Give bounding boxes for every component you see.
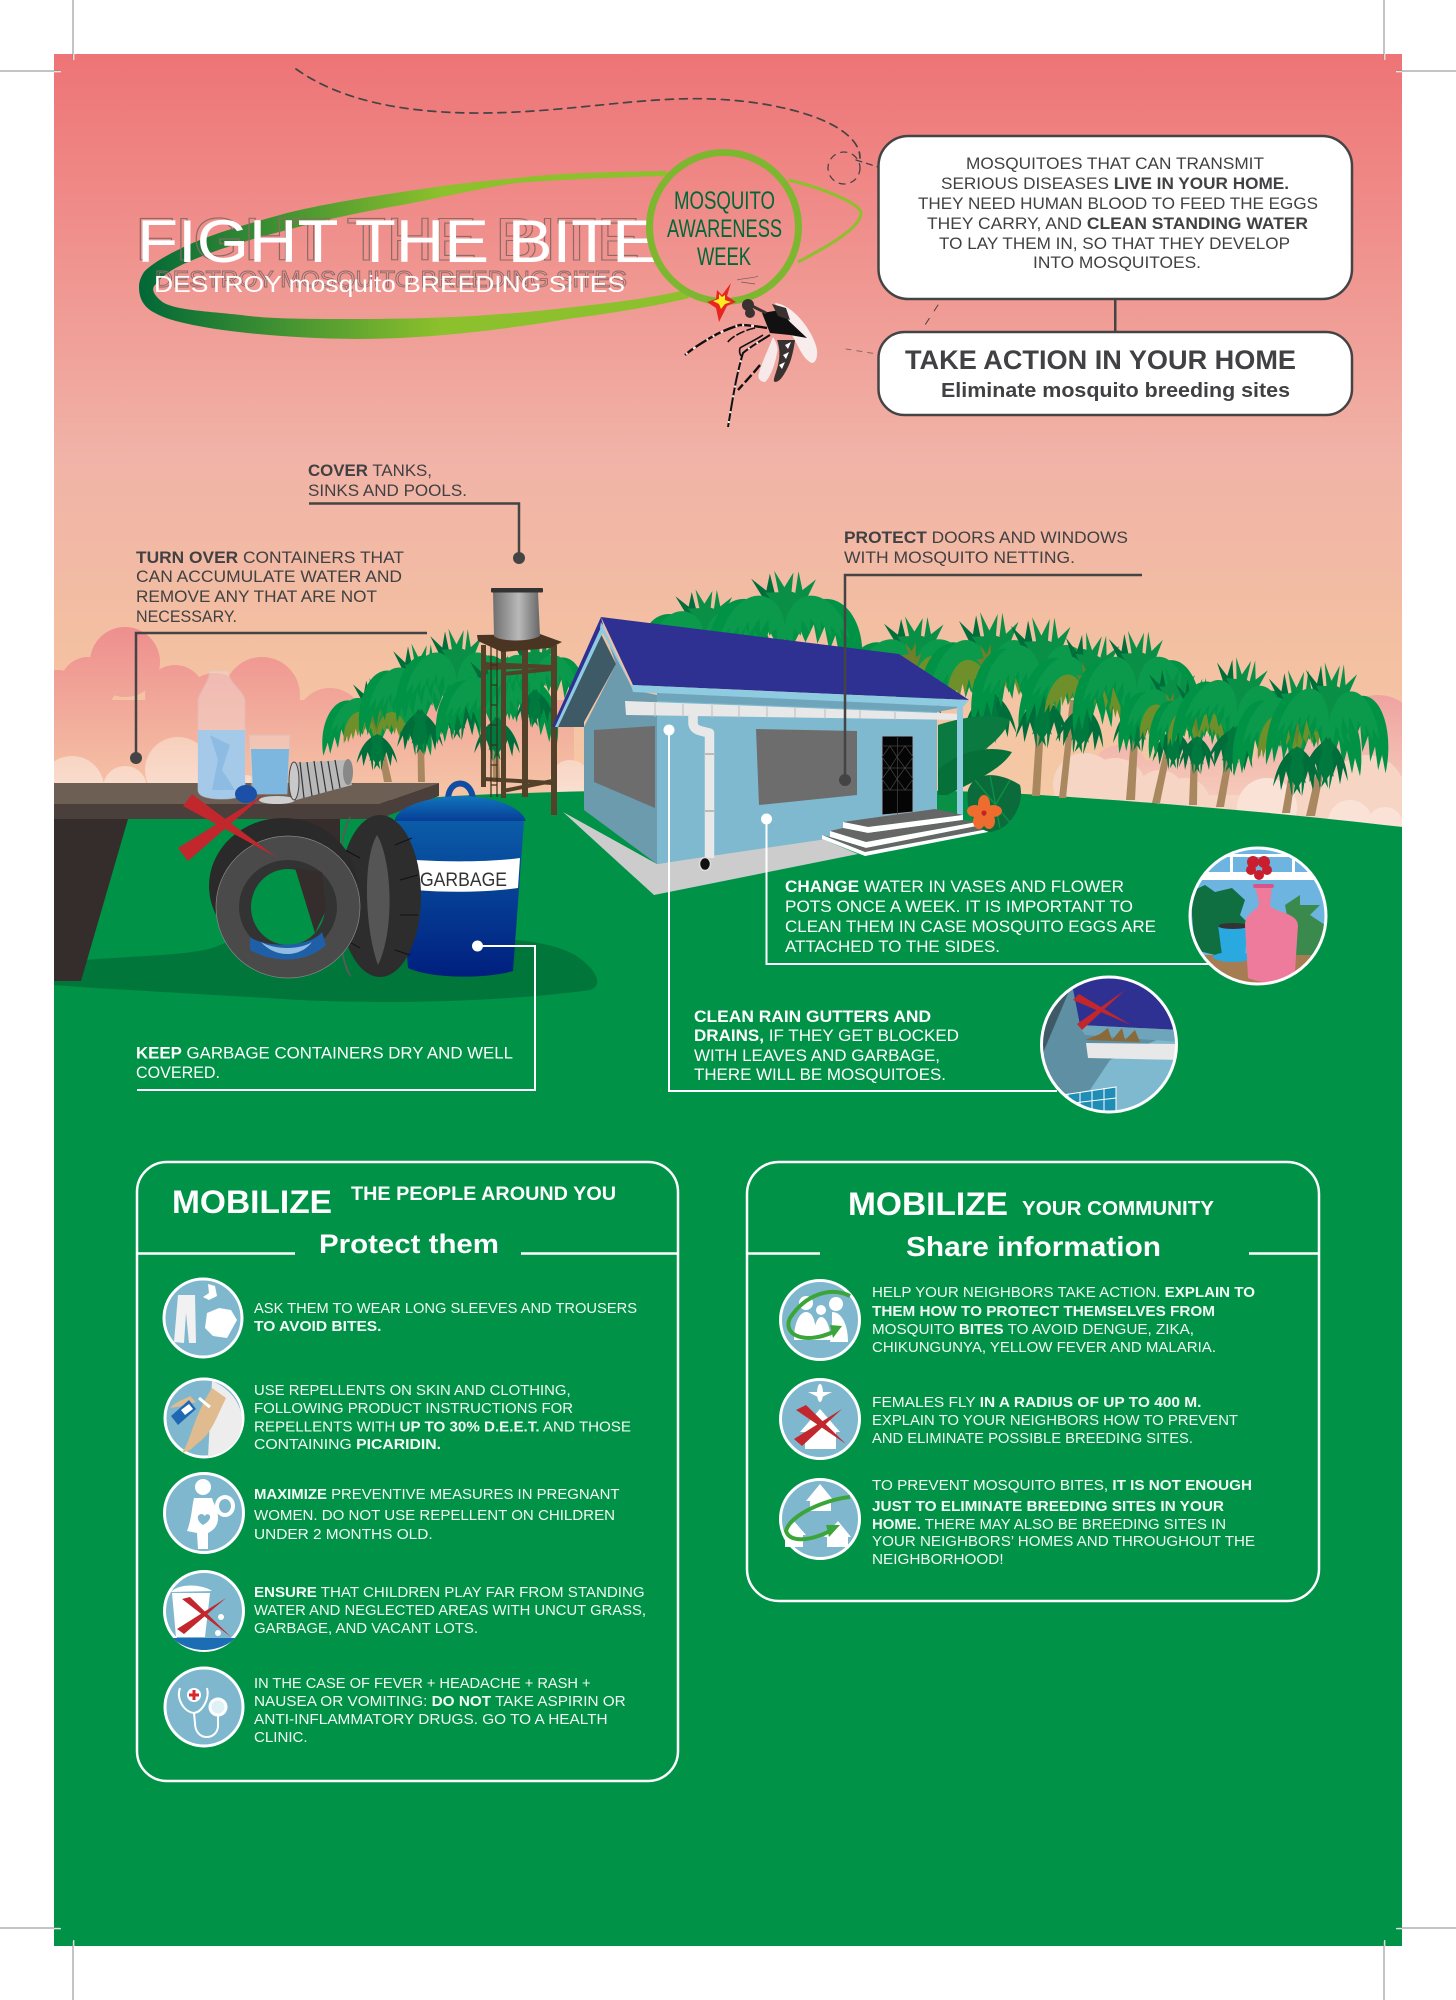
tin can bbox=[289, 759, 353, 800]
icon: family with arrow bbox=[780, 1280, 860, 1360]
callout: mosquitoes intro: SERIOUS DISEASES LIVE IN YOUR HOME. bbox=[941, 174, 1289, 193]
title swoosh bbox=[139, 171, 861, 339]
label: cover tanks bbox=[308, 461, 467, 500]
label: clean gutters: THERE WILL BE MOSQUITOES. bbox=[694, 1065, 946, 1084]
text: fever bbox=[254, 1675, 626, 1746]
label: change water: ATTACHED TO THE SIDES. bbox=[785, 937, 1000, 956]
icon: repellent on arm bbox=[165, 1379, 243, 1457]
fascia bbox=[555, 623, 604, 727]
lid bbox=[395, 796, 526, 821]
label: cover tanks: SINKS AND POOLS. bbox=[308, 481, 467, 500]
upright tire bbox=[338, 815, 421, 977]
palm trees left bbox=[322, 626, 586, 782]
label: clean gutters: WITH LEAVES AND GARBAGE, bbox=[694, 1046, 940, 1065]
flight path dashed bbox=[296, 69, 938, 354]
text: help neighbours: THEM HOW TO PROTECT THEMSELVES FROM bbox=[872, 1303, 1215, 1320]
text: females fly: EXPLAIN TO YOUR NEIGHBORS HOW TO PREVENT bbox=[872, 1412, 1238, 1429]
far leg seen through tire bbox=[295, 868, 326, 933]
icon: pregnant woman bbox=[164, 1474, 244, 1552]
text: repellents: USE REPELLENTS ON SKIN AND CLOTHING, bbox=[254, 1382, 571, 1399]
label: turn over: CAN ACCUMULATE WATER AND bbox=[136, 567, 402, 586]
table front bbox=[54, 804, 379, 819]
callout: take action bbox=[878, 332, 1352, 415]
callout: mosquitoes intro: TO LAY THEM IN, SO THAT THEY DEVELOP bbox=[939, 234, 1290, 253]
heading: the people around you: THE PEOPLE AROUND YOU bbox=[351, 1184, 616, 1205]
garbage label bbox=[415, 858, 520, 892]
badge: mosquito awareness week: WEEK bbox=[697, 243, 751, 271]
label: keep garbage bbox=[136, 1044, 513, 1082]
label: clean gutters: CLEAN RAIN GUTTERS AND bbox=[694, 1007, 931, 1026]
mosquito illustration bbox=[685, 276, 817, 427]
ladder bbox=[491, 645, 497, 797]
garbage label: GARBAGE bbox=[420, 870, 507, 891]
icon: stethoscope bbox=[165, 1668, 243, 1746]
text: repellents: REPELLENTS WITH UP TO 30% D.E.E.T. AND THOSE bbox=[254, 1418, 631, 1436]
table top bbox=[54, 783, 439, 804]
label: change water: CHANGE WATER IN VASES AND FLOWER bbox=[785, 877, 1124, 896]
label: clean gutters: DRAINS, IF THEY GET BLOCKED bbox=[694, 1026, 959, 1045]
text: not enough: JUST TO ELIMINATE BREEDING SITES IN YOUR bbox=[872, 1498, 1224, 1515]
roof bbox=[601, 617, 969, 700]
text: not enough: YOUR NEIGHBORS’ HOMES AND THROUGHOUT THE bbox=[872, 1533, 1255, 1550]
text: help neighbours: HELP YOUR NEIGHBORS TAKE ACTION. EXPLAIN TO bbox=[872, 1284, 1255, 1301]
tank on tower bbox=[491, 588, 543, 640]
poster sky background bbox=[54, 54, 1402, 854]
drinking glass bbox=[249, 735, 290, 794]
icon: mosquito house crossed bbox=[780, 1380, 860, 1458]
label: protect: PROTECT DOORS AND WINDOWS bbox=[844, 528, 1128, 547]
text: fever: CLINIC. bbox=[254, 1729, 308, 1746]
tropical plant bbox=[967, 775, 1021, 832]
label: change water: CLEAN THEM IN CASE MOSQUITO EGGS ARE bbox=[785, 917, 1156, 936]
text: repellents: CONTAINING PICARIDIN. bbox=[254, 1436, 441, 1453]
red x on table items bbox=[178, 794, 276, 861]
pointer: turn over line bbox=[130, 633, 427, 764]
concrete slab bbox=[563, 812, 858, 895]
callout: mosquitoes intro: MOSQUITOES THAT CAN TRANSMIT bbox=[966, 154, 1264, 173]
label: clean gutters bbox=[694, 1007, 959, 1084]
icon: clothing bbox=[164, 1279, 242, 1357]
text: pregnant women: UNDER 2 MONTHS OLD. bbox=[254, 1526, 433, 1543]
table bbox=[54, 783, 439, 981]
pointer: garbage line bbox=[137, 940, 535, 1090]
text: pregnant women: WOMEN. DO NOT USE REPELLENT ON CHILDREN bbox=[254, 1507, 615, 1524]
pointer: netting line bbox=[839, 575, 1142, 786]
tower platform bbox=[477, 634, 562, 652]
text: long sleeves: TO AVOID BITES. bbox=[254, 1318, 382, 1335]
text: females fly bbox=[872, 1394, 1238, 1447]
callout: mosquitoes intro: THEY NEED HUMAN BLOOD TO FEED THE EGGS bbox=[918, 194, 1318, 213]
door bbox=[882, 736, 913, 815]
side window bbox=[594, 726, 655, 808]
drain pipe bbox=[693, 716, 715, 870]
text: pregnant women: MAXIMIZE PREVENTIVE MEASURES IN PREGNANT bbox=[254, 1486, 620, 1503]
porch plants bbox=[938, 716, 1012, 815]
front window with netting bbox=[756, 729, 857, 805]
text: repellents bbox=[254, 1382, 631, 1453]
side wall bbox=[584, 630, 657, 864]
table far leg bbox=[290, 819, 340, 950]
text: females fly: FEMALES FLY IN A RADIUS OF UP TO 400 M. bbox=[872, 1394, 1202, 1411]
palms behind house bbox=[637, 568, 986, 727]
lid handle bbox=[448, 784, 473, 800]
text: females fly: AND ELIMINATE POSSIBLE BREEDING SITES. bbox=[872, 1430, 1193, 1447]
text: help neighbours: CHIKUNGUNYA, YELLOW FEVER AND MALARIA. bbox=[872, 1339, 1216, 1356]
inset: vase bbox=[1188, 846, 1328, 987]
bottle cap and lid bbox=[235, 785, 295, 804]
garbage can bbox=[395, 784, 526, 977]
text: fever: IN THE CASE OF FEVER + HEADACHE + RASH + bbox=[254, 1675, 591, 1692]
front tire bbox=[216, 836, 360, 978]
heading: mobilize: MOBILIZE bbox=[848, 1186, 1008, 1222]
badge: mosquito awareness week bbox=[650, 152, 798, 302]
tires bbox=[209, 815, 421, 978]
label: cover tanks: COVER TANKS, bbox=[308, 461, 432, 480]
ground bbox=[54, 789, 1402, 1946]
label: protect: WITH MOSQUITO NETTING. bbox=[844, 548, 1075, 567]
text: children bbox=[254, 1584, 646, 1637]
text: repellents: FOLLOWING PRODUCT INSTRUCTIONS FOR bbox=[254, 1400, 573, 1417]
plastic bottle bbox=[198, 671, 245, 799]
lying tire tread bbox=[209, 818, 357, 954]
text: children: WATER AND NEGLECTED AREAS WITH UNCUT GRASS, bbox=[254, 1602, 646, 1619]
ground shadow bbox=[54, 938, 597, 1002]
icon: neighbourhood houses bbox=[780, 1480, 860, 1558]
label: change water: POTS ONCE A WEEK. IT IS IMPORTANT TO bbox=[785, 897, 1133, 916]
text: children: ENSURE THAT CHILDREN PLAY FAR FROM STANDING bbox=[254, 1584, 645, 1601]
heading: your community: YOUR COMMUNITY bbox=[1022, 1198, 1215, 1220]
text: not enough: TO PREVENT MOSQUITO BITES, IT IS NOT ENOUGH bbox=[872, 1477, 1252, 1494]
text: children: GARBAGE, AND VACANT LOTS. bbox=[254, 1620, 478, 1637]
water tower bbox=[477, 588, 562, 815]
badge: mosquito awareness week: AWARENESS bbox=[667, 215, 782, 243]
gable trim bbox=[552, 617, 603, 727]
label: keep garbage: COVERED. bbox=[136, 1063, 220, 1082]
roof edge light bbox=[600, 622, 634, 691]
label: turn over: REMOVE ANY THAT ARE NOT bbox=[136, 587, 377, 606]
subtitle: destroy mosquito breeding sites: DESTROY mosquito BREEDING SITES bbox=[154, 271, 625, 297]
label: turn over: TURN OVER CONTAINERS THAT bbox=[136, 548, 404, 567]
pointer: cover tanks line bbox=[309, 504, 525, 564]
callout: mosquitoes intro bbox=[878, 136, 1352, 299]
pointer: vases line bbox=[761, 814, 1209, 964]
callout: mosquitoes intro: INTO MOSQUITOES. bbox=[1033, 253, 1201, 272]
gable shadow bbox=[555, 632, 616, 727]
badge: mosquito awareness week: MOSQUITO bbox=[674, 187, 775, 215]
icon: bucket crossed out bbox=[164, 1572, 244, 1650]
heading: mobilize: MOBILIZE bbox=[172, 1184, 332, 1220]
title: fight the bite: FIGHT THE BITE bbox=[135, 206, 640, 273]
clouds bbox=[54, 627, 1402, 827]
front wall bbox=[657, 693, 937, 864]
table near leg bbox=[54, 819, 128, 981]
text: not enough bbox=[872, 1477, 1255, 1568]
water in tire bbox=[250, 932, 326, 960]
table side bbox=[379, 783, 439, 819]
text: fever: ANTI-INFLAMMATORY DRUGS. GO TO A HEALTH bbox=[254, 1711, 608, 1728]
porch post bbox=[957, 706, 963, 816]
house bbox=[552, 617, 1021, 895]
text: help neighbours: MOSQUITO BITES TO AVOID DENGUE, ZIKA, bbox=[872, 1321, 1194, 1338]
text: not enough: NEIGHBORHOOD! bbox=[872, 1551, 1004, 1568]
panel: mobilize your community bbox=[747, 1162, 1319, 1601]
divider heading: share information: Share information bbox=[906, 1231, 1161, 1262]
pointer: gutter line bbox=[664, 724, 1057, 1091]
callout: mosquitoes intro: THEY CARRY, AND CLEAN STANDING WATER bbox=[927, 214, 1308, 233]
icon: impact star centre bbox=[713, 294, 731, 309]
label: protect bbox=[844, 528, 1128, 567]
text: help neighbours bbox=[872, 1284, 1255, 1356]
rain gutter bbox=[625, 701, 963, 720]
connector bbox=[1114, 299, 1116, 332]
eave bbox=[631, 685, 969, 707]
eave shadow bbox=[657, 693, 963, 712]
text: pregnant women bbox=[254, 1486, 620, 1543]
panel: mobilize the people around you bbox=[137, 1162, 678, 1781]
text: long sleeves bbox=[254, 1300, 637, 1335]
inset: gutter bbox=[1040, 975, 1180, 1115]
can body bbox=[397, 821, 524, 977]
palm trees right bbox=[919, 609, 1394, 816]
icon: impact star bbox=[707, 283, 736, 322]
steps bbox=[822, 809, 988, 856]
callout: take action: TAKE ACTION IN YOUR HOME bbox=[905, 345, 1296, 375]
label: turn over bbox=[136, 548, 404, 626]
label: change water bbox=[785, 877, 1156, 956]
subtitle: destroy mosquito breeding sites: DESTROY MOSQUITO BREEDING SITES bbox=[155, 266, 627, 292]
divider heading: protect them: Protect them bbox=[319, 1229, 499, 1259]
text: long sleeves: ASK THEM TO WEAR LONG SLEEVES AND TROUSERS bbox=[254, 1300, 637, 1317]
label: turn over: NECESSARY. bbox=[136, 607, 237, 626]
callout: take action: Eliminate mosquito breeding sites bbox=[941, 379, 1290, 402]
tower posts bbox=[481, 645, 557, 815]
text: fever: NAUSEA OR VOMITING: DO NOT TAKE ASPIRIN OR bbox=[254, 1693, 626, 1710]
title: fight the bite: FIGHT THE BITE bbox=[137, 208, 657, 275]
label: keep garbage: KEEP GARBAGE CONTAINERS DRY AND WELL bbox=[136, 1044, 513, 1062]
text: not enough: HOME. THERE MAY ALSO BE BREEDING SITES IN bbox=[872, 1516, 1226, 1533]
